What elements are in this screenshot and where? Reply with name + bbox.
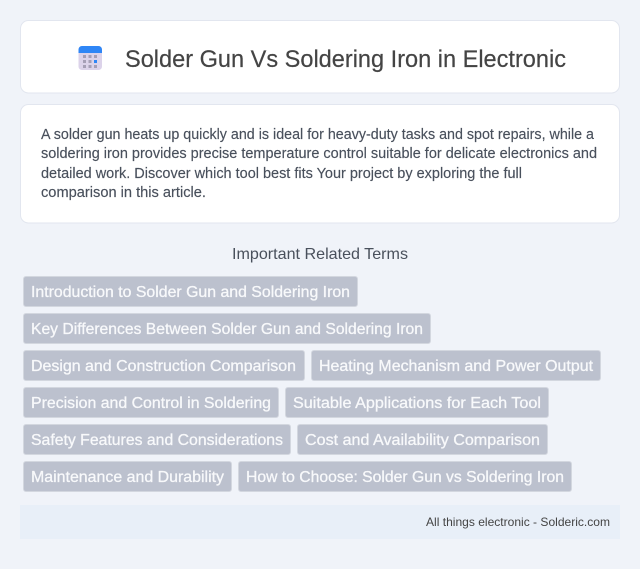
tag [298,424,548,454]
tag [24,350,304,380]
tag: Design and Construction Comparison [31,358,296,375]
tag [238,462,572,492]
tag: Heating Mechanism and Power Output [319,358,594,375]
text block: summary: A solder gun heats up quickly and is ideal for heavy-duty tasks and spot repairs, while a [41,127,595,143]
tag: Key Differences Between Solder Gun and Soldering Iron [31,321,423,338]
tag: Cost and Availability Comparison [305,432,540,449]
panel: related term tags [24,276,600,492]
footer credit: All things electronic - Solderic.com [426,515,610,529]
title: Solder Gun Vs Soldering Iron in Electronic [125,46,566,73]
tag: Suitable Applications for Each Tool [293,395,541,412]
panel: header card [20,20,620,93]
tag: Introduction to Solder Gun and Soldering Iron [31,284,350,301]
tag [24,462,232,492]
icon: calendar [78,46,102,70]
heading: related terms: Important Related Terms [232,246,408,263]
tag [312,350,600,380]
text block: summary: soldering iron provides precise temperature control suitable for delicate electronics and [41,146,597,162]
footer bar [20,505,620,539]
tag [24,424,290,454]
tag [24,388,278,418]
panel: intro paragraph [20,104,620,223]
text block: summary [41,127,597,201]
tag: How to Choose: Solder Gun vs Soldering Iron [246,469,564,486]
tag [286,388,548,418]
tag [24,276,358,306]
text block: summary: comparison in this article. [41,185,206,201]
text block: summary: detailed work. Discover which tool best fits Your project by exploring the full [41,166,522,182]
tag [24,314,430,344]
tag: Safety Features and Considerations [31,432,283,449]
tag: Maintenance and Durability [31,469,224,486]
tag: Precision and Control in Soldering [31,395,271,412]
